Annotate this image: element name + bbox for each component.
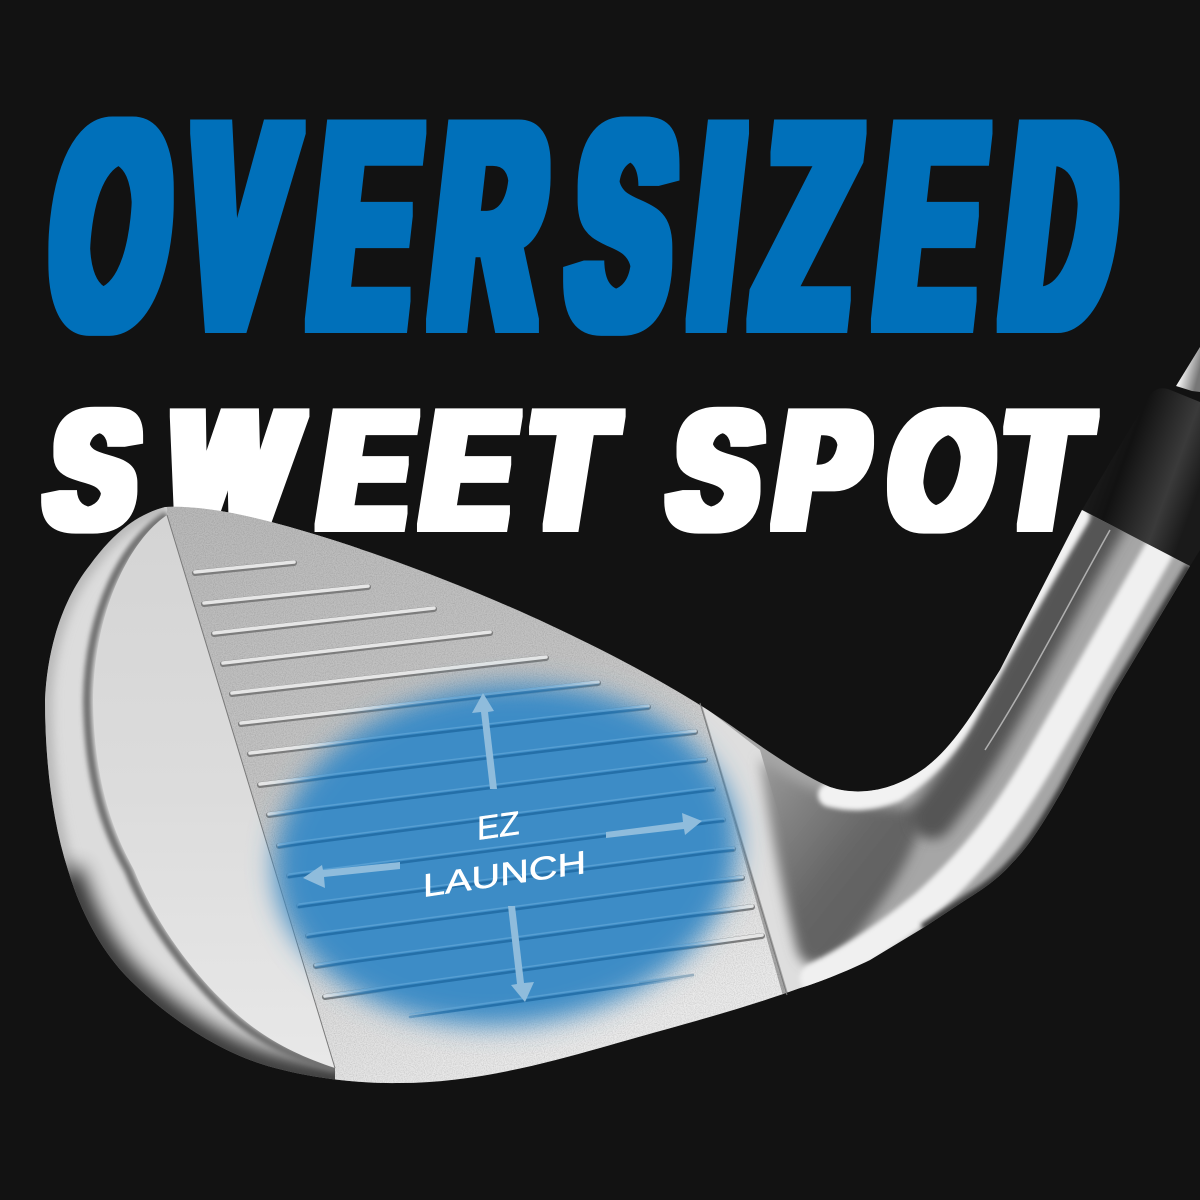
label: LAUNCH: LAUNCH: [423, 844, 586, 904]
rim bottom shadow: [68, 870, 400, 1083]
heel light strip: [702, 705, 830, 1000]
face grooves: [195, 562, 762, 997]
hosel right highlight: [815, 552, 1158, 978]
arrow: right: [606, 813, 702, 838]
hosel outer edge shade: [923, 566, 1190, 928]
toe rim of club: [40, 500, 360, 1100]
heading: OVERSIZED: OVERSIZED: [36, 63, 1132, 388]
hosel left highlight: [830, 516, 1078, 798]
heel and hosel body: [700, 505, 1200, 1010]
last groove faint end: [640, 975, 693, 983]
icon: golf club shaft: [1176, 347, 1200, 392]
infographic canvas: [41, 116, 1200, 1084]
groove shadows: [195, 563, 762, 997]
icon: black ferrule: [1082, 388, 1200, 566]
textured strike face: [167, 506, 786, 1084]
arrow: left: [303, 862, 400, 888]
heel cavity: [760, 758, 925, 965]
arrow: up: [472, 693, 497, 789]
blue groove shadow: [241, 684, 762, 1017]
hosel thin reflection: [985, 530, 1110, 750]
golf wedge club head: [40, 480, 1200, 1110]
sand blast grain: [167, 507, 785, 1083]
rim groove line: [87, 515, 335, 1068]
grooves over blue zone: [241, 681, 762, 1017]
toe flat panel: [93, 515, 335, 1068]
face boundary lines: [167, 515, 787, 1068]
blue sweet spot zone: [258, 662, 754, 1048]
groove highlights: [195, 562, 762, 996]
label: EZ: EZ: [477, 805, 520, 848]
blue groove highlight: [241, 681, 762, 1014]
arrow: down: [508, 906, 534, 1002]
heading: SWEET SPOT: SWEET SPOT: [35, 377, 1098, 565]
rim outer soft shade: [45, 507, 165, 870]
hosel inner dark band: [932, 522, 1105, 818]
